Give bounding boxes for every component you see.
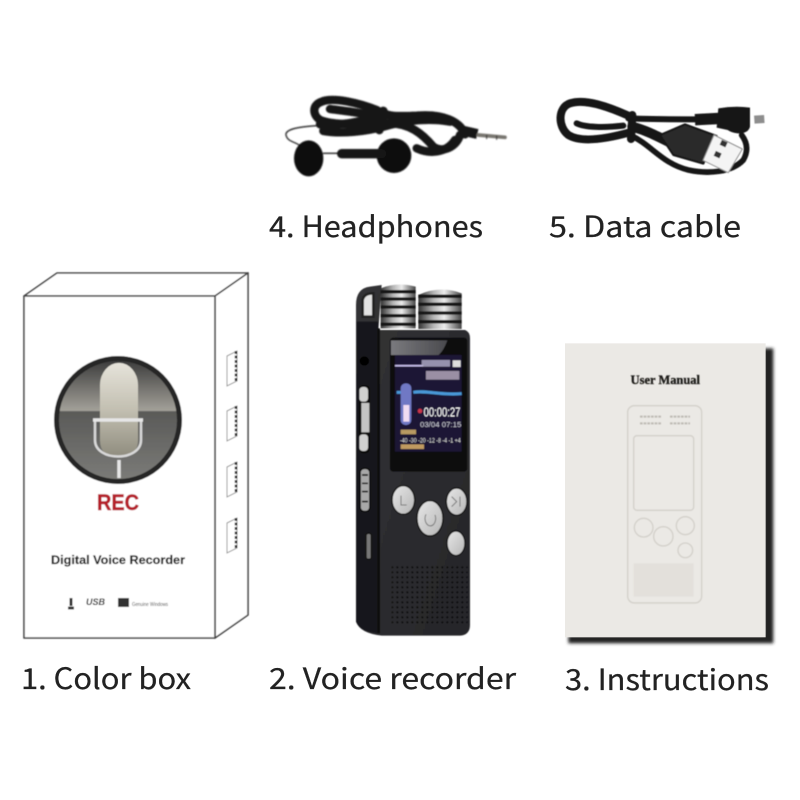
icon: right earbud — [377, 138, 411, 173]
side button — [360, 468, 370, 512]
headphone jack — [360, 356, 369, 366]
icon: USB metal tip — [703, 135, 742, 173]
side switch — [359, 385, 370, 453]
icon: earbud stem — [342, 140, 382, 168]
icon: jack body — [460, 130, 477, 134]
REC text: REC — [97, 490, 139, 515]
headphones — [286, 100, 505, 176]
icon: thin ear wire — [286, 126, 340, 153]
label: 2. Voice recorder: 2. Voice recorder — [269, 656, 517, 698]
speaker grid — [392, 565, 468, 625]
icon: micro USB plug — [695, 118, 722, 120]
recorder body — [356, 285, 470, 636]
icon: microphone badge — [54, 356, 182, 484]
box logos: Genuine Windows — [132, 602, 168, 608]
voice recorder — [356, 285, 470, 636]
label: 4. Headphones: 4. Headphones — [269, 204, 483, 246]
screen display: 03/04 07:15 — [420, 422, 461, 429]
icon: cable loop — [561, 102, 747, 172]
manual recorder outline — [628, 406, 702, 603]
label: 5. Data cable: 5. Data cable — [549, 204, 741, 246]
box outline — [24, 273, 248, 638]
label: 1. Color box: 1. Color box — [21, 656, 191, 698]
screen display: -40 -30 -20 -12 -8 -4 -1 +4 — [400, 437, 461, 444]
button: stop — [392, 486, 415, 514]
icon: earphone cable bundle — [314, 100, 465, 152]
screen bezel — [390, 338, 467, 472]
box logos: USB — [86, 597, 106, 607]
label: 3. Instructions: 3. Instructions — [565, 657, 769, 699]
button: rec — [447, 531, 465, 556]
manual title: User Manual — [631, 373, 700, 387]
button: play — [446, 488, 467, 515]
box logos — [68, 597, 168, 608]
screen display — [395, 355, 462, 452]
icon: jack plug — [478, 135, 505, 137]
panel: color box — [24, 273, 248, 638]
icon: left earbud — [294, 140, 323, 176]
microphone grilles — [381, 285, 462, 329]
panel: instruction manual — [565, 343, 773, 643]
USB port — [366, 533, 371, 559]
button: center — [417, 501, 443, 536]
manual shadow — [568, 348, 773, 643]
icon: USB plug body — [660, 124, 717, 164]
button glyphs — [401, 496, 460, 526]
box side perforations — [227, 351, 237, 553]
box product name: Digital Voice Recorder — [51, 553, 185, 567]
screen display: 00:00:27 — [424, 405, 460, 419]
data cable — [561, 102, 764, 173]
manual page — [565, 343, 766, 637]
recorder side rail — [356, 322, 378, 633]
